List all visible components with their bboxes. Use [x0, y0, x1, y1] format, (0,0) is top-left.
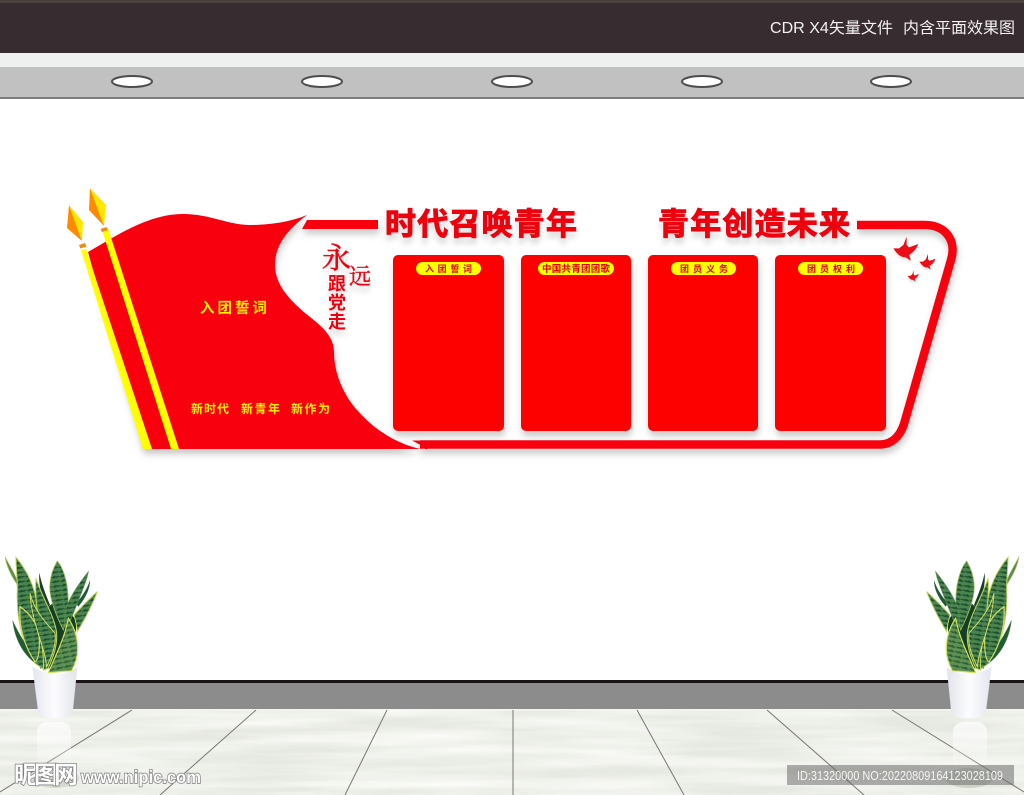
- display wall: [67, 188, 953, 449]
- watermark logo: [14, 762, 201, 789]
- flag poles: [79, 227, 179, 449]
- flag text: slogans: 新青年: [241, 401, 280, 416]
- birds: [893, 237, 936, 281]
- marble floor: [0, 709, 1024, 795]
- watermark logo: www.nipic.com: [80, 767, 201, 787]
- heading left: 时代召唤青年: [385, 207, 577, 242]
- panel: 中国共青团团歌: 中国共青团团歌: [542, 263, 610, 275]
- plant right: [927, 557, 1019, 718]
- panel: 中国共青团团歌: [521, 255, 631, 431]
- heading right: 青年创造未来: [658, 207, 850, 242]
- panel: 入团誓词: [393, 255, 504, 431]
- side slogan: [322, 236, 371, 332]
- side slogan: 远: [349, 260, 371, 291]
- skirting board: [0, 680, 1024, 709]
- panel: 入团誓词: 入团誓词: [425, 263, 472, 274]
- side slogan: 永: [322, 236, 351, 277]
- side slogan: 党: [328, 293, 346, 313]
- spearheads: [67, 188, 106, 241]
- flag text: slogans: [191, 401, 330, 416]
- panel: 团员义务: [648, 255, 758, 431]
- flag: [88, 214, 420, 449]
- watermark id box: [787, 765, 1014, 785]
- panel: 团员义务: 团员义务: [680, 263, 728, 274]
- header caption: CDR X4矢量文件: [770, 19, 893, 37]
- plant left: [5, 557, 97, 718]
- header caption: 内含平面效果图: [903, 19, 1015, 37]
- ceiling with lights: [0, 53, 1024, 99]
- flag text: slogans: 新作为: [291, 401, 330, 416]
- side slogan: 走: [328, 312, 346, 332]
- frame line: [302, 220, 953, 449]
- side slogan: 跟: [328, 274, 346, 294]
- flag text: slogans: 新时代: [191, 401, 229, 416]
- flag text: oath: 入团誓词: [200, 299, 267, 317]
- header bar: [0, 0, 1024, 53]
- watermark logo: 昵图网: [14, 762, 78, 789]
- header caption: [770, 19, 1015, 37]
- panel: 团员权利: 团员权利: [807, 263, 855, 274]
- panel: 团员权利: [775, 255, 886, 431]
